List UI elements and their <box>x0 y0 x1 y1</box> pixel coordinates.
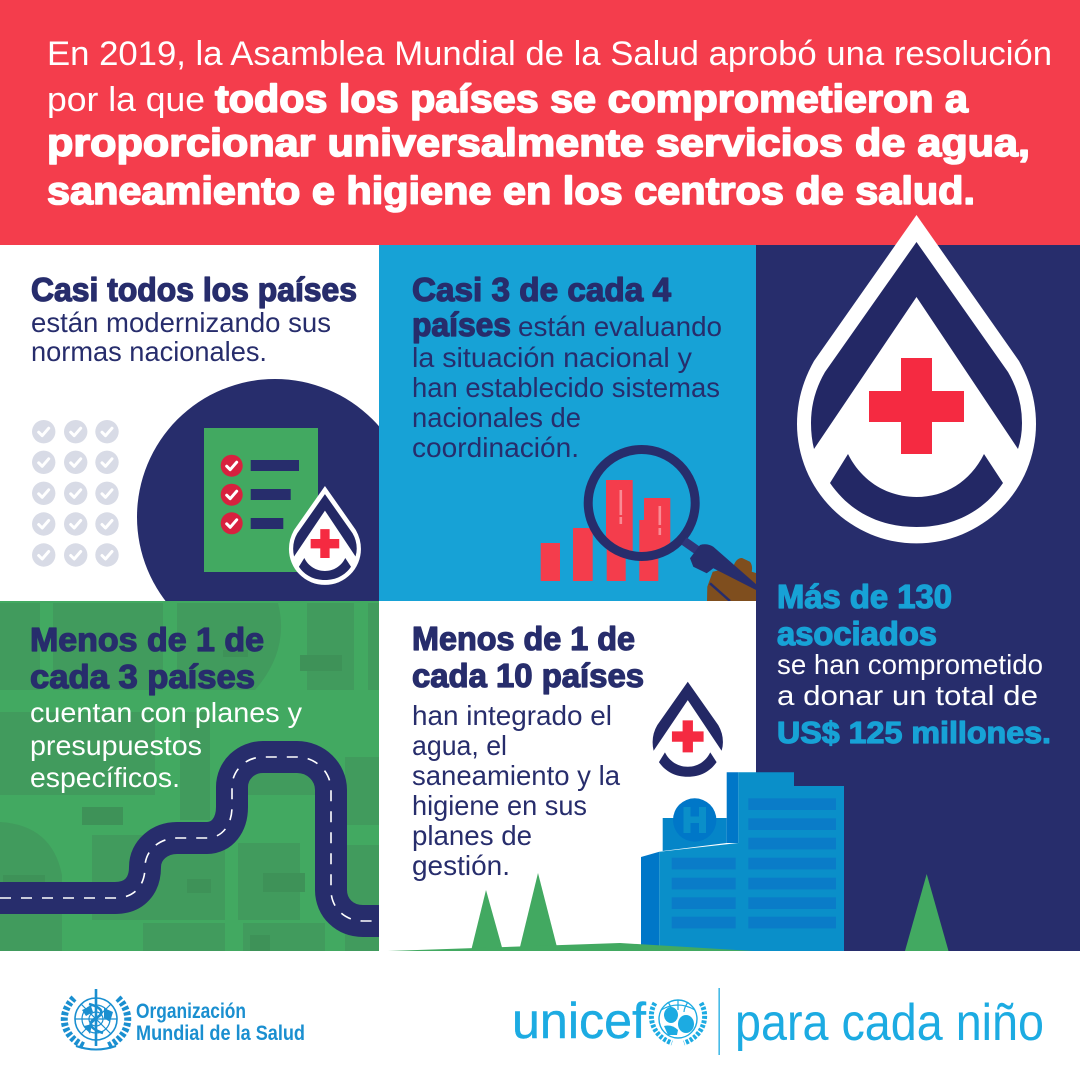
text: almost 3 of 4 countries: nacionales de <box>412 402 581 433</box>
text: almost all countries: están modernizando sus <box>31 307 331 338</box>
text: fewer than 1 of 10 countries: saneamiento y la <box>412 760 621 791</box>
text: fewer than 1 of 10 countries <box>412 620 644 881</box>
text: fewer than 1 of 10 countries: gestión. <box>412 850 510 881</box>
illustration: ground <box>388 943 753 951</box>
heading: resolution statement: saneamiento e higiene en los centros de salud. <box>47 170 975 213</box>
heading: resolution statement: En 2019, la Asamblea Mundial de la Salud aprobó una resolución <box>47 35 1052 73</box>
heading: resolution statement: por la que <box>47 81 205 119</box>
text: fewer than 1 of 3 countries <box>30 621 302 793</box>
logo: unicef emblem <box>651 1000 705 1043</box>
panel: partners <box>756 215 1080 951</box>
icon: magnifying glass <box>588 450 757 601</box>
text: more than 130 partners: a donar un total de <box>777 680 1038 711</box>
logo: unicef wordmark: unicef <box>512 993 646 1049</box>
divider <box>718 988 720 1055</box>
text: more than 130 partners <box>777 578 1051 750</box>
panel: national assessment <box>379 245 757 601</box>
logo: WHO emblem <box>64 989 128 1050</box>
illustration: trees <box>471 873 948 951</box>
heading: resolution statement: proporcionar universalmente servicios de agua, <box>47 122 1030 165</box>
map: street blocks <box>0 603 379 951</box>
text: almost 3 of 4 countries: coordinación. <box>412 432 579 463</box>
heading: resolution statement: todos los países se comprometieron a <box>215 78 968 121</box>
text: fewer than 1 of 3 countries: cada 3 países <box>30 658 255 695</box>
text: almost 3 of 4 countries: la situación nacional y <box>412 342 692 373</box>
text: almost all countries: normas nacionales. <box>31 336 267 367</box>
icon: water drop with cross <box>653 682 723 777</box>
panel: management plans <box>379 601 756 951</box>
text: fewer than 1 of 3 countries: presupuestos <box>30 730 202 761</box>
icon: hand <box>707 558 757 601</box>
text: fewer than 1 of 3 countries: específicos. <box>30 762 180 793</box>
text: fewer than 1 of 10 countries: cada 10 países <box>412 657 644 694</box>
panel: header <box>0 0 1080 245</box>
text: almost all countries <box>31 271 357 367</box>
text: more than 130 partners: US$ 125 millones. <box>777 715 1051 750</box>
panel: plans and budgets <box>0 601 380 951</box>
text: fewer than 1 of 10 countries: agua, el <box>412 730 507 761</box>
text: fewer than 1 of 10 countries: higiene en sus <box>412 790 587 821</box>
icon: green checklist document <box>204 428 318 572</box>
tagline: para cada niño: para cada niño <box>735 994 1044 1052</box>
icon: grey check grid <box>32 420 119 567</box>
text: fewer than 1 of 3 countries: cuentan con planes y <box>30 697 302 728</box>
text: almost all countries: Casi todos los países <box>31 271 357 308</box>
panel: national standards <box>32 276 379 601</box>
icon: small water drop with cross <box>289 486 361 585</box>
text: almost 3 of 4 countries: están evaluando <box>518 311 722 342</box>
illustration: hospital <box>641 772 844 951</box>
text: more than 130 partners: se han comprometido <box>777 649 1043 680</box>
logo text: Organización Mundial de la Salud: Organización <box>136 1000 246 1023</box>
chart: red bars <box>541 480 670 581</box>
text: more than 130 partners: asociados <box>777 615 937 652</box>
icon: large water drop with cross <box>797 215 1036 543</box>
icon: exclamation marks <box>620 490 661 535</box>
icon: winding road <box>0 757 380 921</box>
logo text: Organización Mundial de la Salud: Mundial de la Salud <box>136 1022 305 1045</box>
text: almost 3 of 4 countries: Casi 3 de cada 4 <box>412 271 672 308</box>
icon: navy circle backdrop <box>137 379 379 601</box>
footer <box>0 951 1080 1080</box>
text: almost 3 of 4 countries: países <box>412 306 511 343</box>
text: almost 3 of 4 countries: han establecido sistemas <box>412 372 720 403</box>
text: fewer than 1 of 10 countries: han integrado el <box>412 700 612 731</box>
text: fewer than 1 of 3 countries: Menos de 1 de <box>30 621 264 658</box>
text: more than 130 partners: Más de 130 <box>777 578 952 615</box>
text: almost 3 of 4 countries <box>412 271 722 463</box>
logo text: Organización Mundial de la Salud <box>136 1000 305 1045</box>
text: fewer than 1 of 10 countries: Menos de 1 de <box>412 620 635 657</box>
text: fewer than 1 of 10 countries: planes de <box>412 820 532 851</box>
heading: resolution statement <box>47 35 1052 213</box>
